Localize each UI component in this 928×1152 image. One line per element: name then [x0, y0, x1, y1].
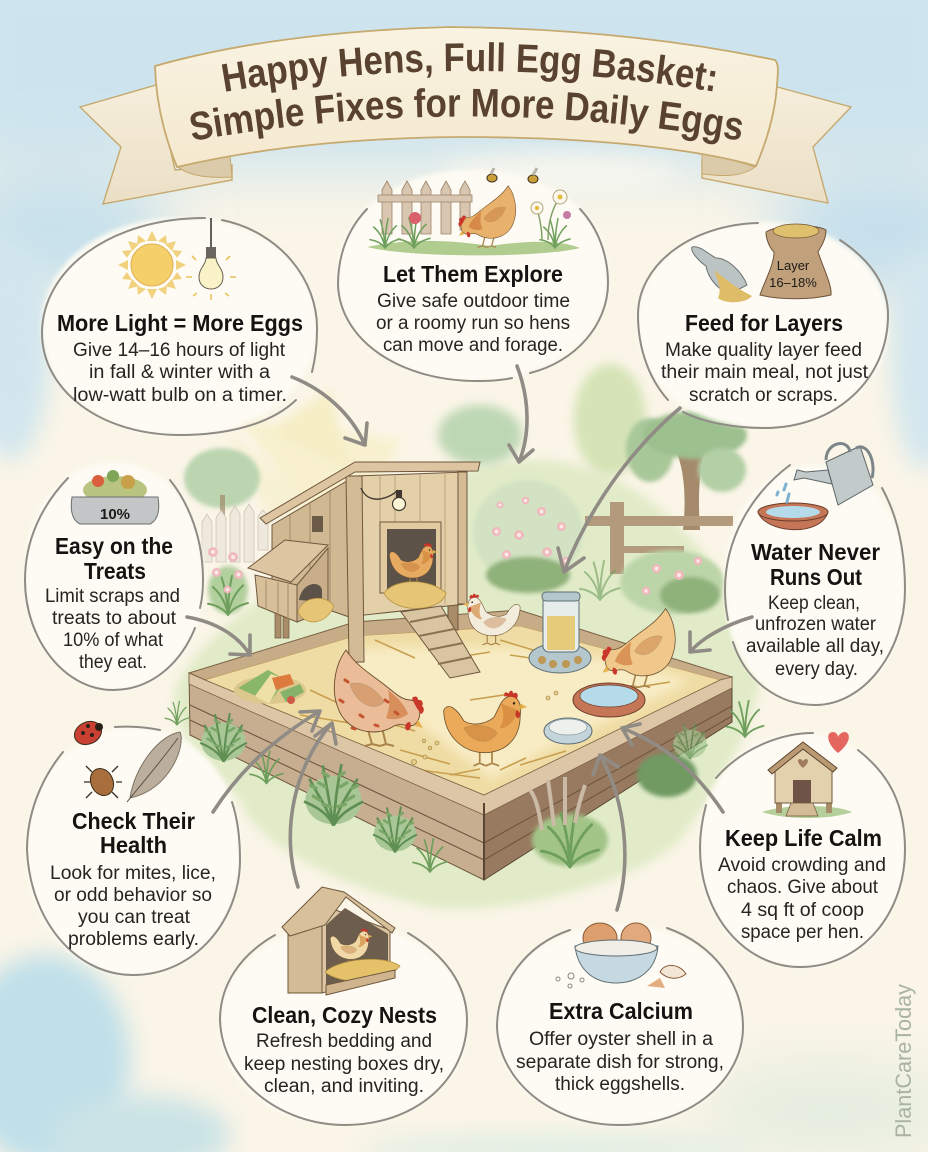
- speckled hen: [334, 650, 424, 746]
- body text: [45, 586, 180, 673]
- feeder: [529, 592, 591, 673]
- side nest box: [248, 540, 334, 638]
- garden backdrop: [174, 364, 761, 909]
- bed rim: [189, 673, 732, 815]
- icon: feed sack: [760, 224, 831, 299]
- body text: [718, 855, 886, 943]
- body text: 4 sq ft of coop: [741, 900, 864, 921]
- body text: [376, 291, 570, 356]
- ramp: [401, 606, 480, 678]
- plank seams: [190, 705, 732, 860]
- panel: water: [725, 444, 905, 705]
- heading: Health: [100, 832, 167, 858]
- panel: health: [27, 717, 240, 975]
- icon: water basin: [758, 503, 828, 530]
- heading: [72, 808, 195, 858]
- heading: Clean, Cozy Nests: [252, 1002, 437, 1028]
- rose bush: [473, 480, 583, 593]
- hanging lamp: [361, 488, 406, 510]
- body text: scratch or scraps.: [689, 385, 838, 406]
- garden plants: [165, 701, 764, 872]
- grass tuft: [580, 561, 620, 600]
- heading: Water Never: [751, 539, 880, 565]
- icon: eggshell bowl: [556, 923, 686, 988]
- panel: explore: [338, 168, 608, 381]
- arrow: nests: [290, 723, 336, 887]
- white hen: [463, 594, 520, 645]
- body text: Give safe outdoor time: [377, 291, 570, 312]
- body text: or a roomy run so hens: [376, 313, 570, 334]
- arrow: explore: [509, 366, 533, 462]
- body text: clean, and inviting.: [264, 1076, 424, 1097]
- watermark: PlantCareToday: [891, 984, 916, 1138]
- body text: chaos. Give about: [727, 877, 879, 898]
- panel: feed: [638, 222, 888, 428]
- icon: ladybug: [71, 717, 105, 749]
- title text: Happy Hens, Full Egg Basket:: [222, 42, 716, 93]
- icon: bees: [487, 168, 538, 183]
- roof: [260, 462, 480, 524]
- grain bits: [412, 691, 558, 764]
- picket fence: [202, 504, 268, 562]
- rail fence: [585, 502, 733, 574]
- body text: keep nesting boxes dry,: [244, 1054, 444, 1075]
- heading: Check Their: [72, 808, 195, 834]
- body text: or odd behavior so: [54, 885, 212, 906]
- ground wash: [174, 460, 761, 909]
- title subtitle: Simple Fixes for More Daily Eggs: [190, 88, 742, 144]
- heading: Let Them Explore: [383, 261, 563, 287]
- feed scraps: [234, 670, 306, 704]
- icon: watering can: [777, 444, 873, 505]
- heading: Easy on the: [55, 533, 173, 559]
- right shrub: [620, 550, 724, 614]
- ribbon tail left: [80, 85, 232, 204]
- icon: small coop: [762, 742, 852, 818]
- sun rays: [225, 390, 400, 520]
- heading: Keep Life Calm: [725, 825, 882, 851]
- back walls: [189, 610, 732, 683]
- icon: nesting box: [282, 887, 400, 995]
- body text: Look for mites, lice,: [50, 863, 216, 884]
- soft background foliage: [438, 405, 522, 465]
- left wall: [189, 673, 484, 880]
- heading: [751, 539, 880, 590]
- right tree: [626, 411, 747, 530]
- ribbon tail right: [702, 85, 851, 203]
- coop stilts: [448, 600, 458, 630]
- body text: thick eggshells.: [555, 1074, 685, 1095]
- heading: Runs Out: [770, 564, 862, 590]
- heading: More Light = More Eggs: [57, 310, 303, 336]
- body text: [244, 1031, 444, 1097]
- body text: can move and forage.: [383, 335, 563, 356]
- panel: calcium: [497, 923, 743, 1125]
- golden hen: [444, 691, 527, 766]
- body text: in fall & winter with a: [89, 362, 270, 383]
- arrow: treats: [187, 617, 250, 655]
- left tree: [184, 448, 260, 515]
- body text: [73, 340, 287, 406]
- bowl percent: 10%: [100, 506, 130, 523]
- left flowers: [208, 547, 248, 615]
- sack percentage: 16–18%: [769, 275, 817, 290]
- body text: separate dish for strong,: [516, 1052, 724, 1073]
- water bowl: [573, 683, 645, 717]
- body text: [50, 863, 216, 950]
- heading: [55, 533, 173, 584]
- icon: light bulb: [186, 218, 236, 300]
- front wall: [355, 472, 466, 616]
- straw strokes: [240, 630, 670, 778]
- heading: Feed for Layers: [685, 310, 843, 336]
- icon: scoop: [692, 247, 752, 302]
- panel: nests: [220, 887, 467, 1125]
- pecking hen: [602, 609, 675, 687]
- body text: treats to about: [52, 608, 177, 629]
- body text: you can treat: [78, 907, 191, 928]
- heading: Treats: [84, 558, 146, 584]
- body text: low-watt bulb on a timer.: [73, 385, 287, 406]
- arrow: light: [292, 377, 367, 445]
- body text: Avoid crowding and: [718, 855, 886, 876]
- title banner: [78, 26, 852, 205]
- arrow: water: [690, 617, 752, 652]
- icon: fence: [378, 181, 472, 234]
- panel: more light: [42, 218, 317, 435]
- icon: sun: [118, 231, 186, 299]
- icon: hen: [458, 186, 516, 247]
- body text: [516, 1029, 724, 1095]
- body text: their main meal, not just: [661, 362, 869, 383]
- coop door: [380, 522, 446, 608]
- body text: Make quality layer feed: [665, 340, 862, 361]
- body text: available all day,: [746, 636, 884, 657]
- body text: Refresh bedding and: [256, 1031, 432, 1052]
- icon: heart: [828, 732, 849, 753]
- body text: they eat.: [79, 652, 147, 673]
- icon: treat bowl: [71, 470, 159, 524]
- arrow: calm: [622, 724, 723, 812]
- body text: [746, 593, 884, 680]
- body text: every day.: [775, 659, 858, 680]
- body text: problems early.: [68, 929, 199, 950]
- oyster shell dish: [544, 718, 592, 744]
- body text: Limit scraps and: [45, 586, 180, 607]
- panel: calm: [700, 732, 905, 967]
- body text: Offer oyster shell in a: [529, 1029, 713, 1050]
- heading: Extra Calcium: [549, 998, 693, 1024]
- straw floor: [205, 626, 720, 795]
- panel: treats: [25, 462, 203, 690]
- body text: unfrozen water: [755, 614, 877, 635]
- coop: [248, 462, 480, 678]
- body text: space per hen.: [741, 922, 864, 943]
- arrow: health: [213, 711, 320, 812]
- sack label: Layer: [777, 258, 810, 273]
- body text: [661, 340, 869, 406]
- ribbon body: [155, 27, 778, 167]
- icon: beetle: [84, 765, 122, 799]
- raised bed with straw: [189, 610, 732, 880]
- arrow: feed: [558, 408, 680, 572]
- arrow: calcium: [593, 755, 625, 910]
- body text: 10% of what: [63, 630, 164, 651]
- body text: Keep clean,: [768, 593, 860, 614]
- right wall: [484, 677, 732, 880]
- icon: feather: [127, 732, 181, 802]
- body text: Give 14–16 hours of light: [73, 340, 286, 361]
- side wall: [272, 478, 352, 618]
- icon: grass and flowers: [367, 190, 580, 255]
